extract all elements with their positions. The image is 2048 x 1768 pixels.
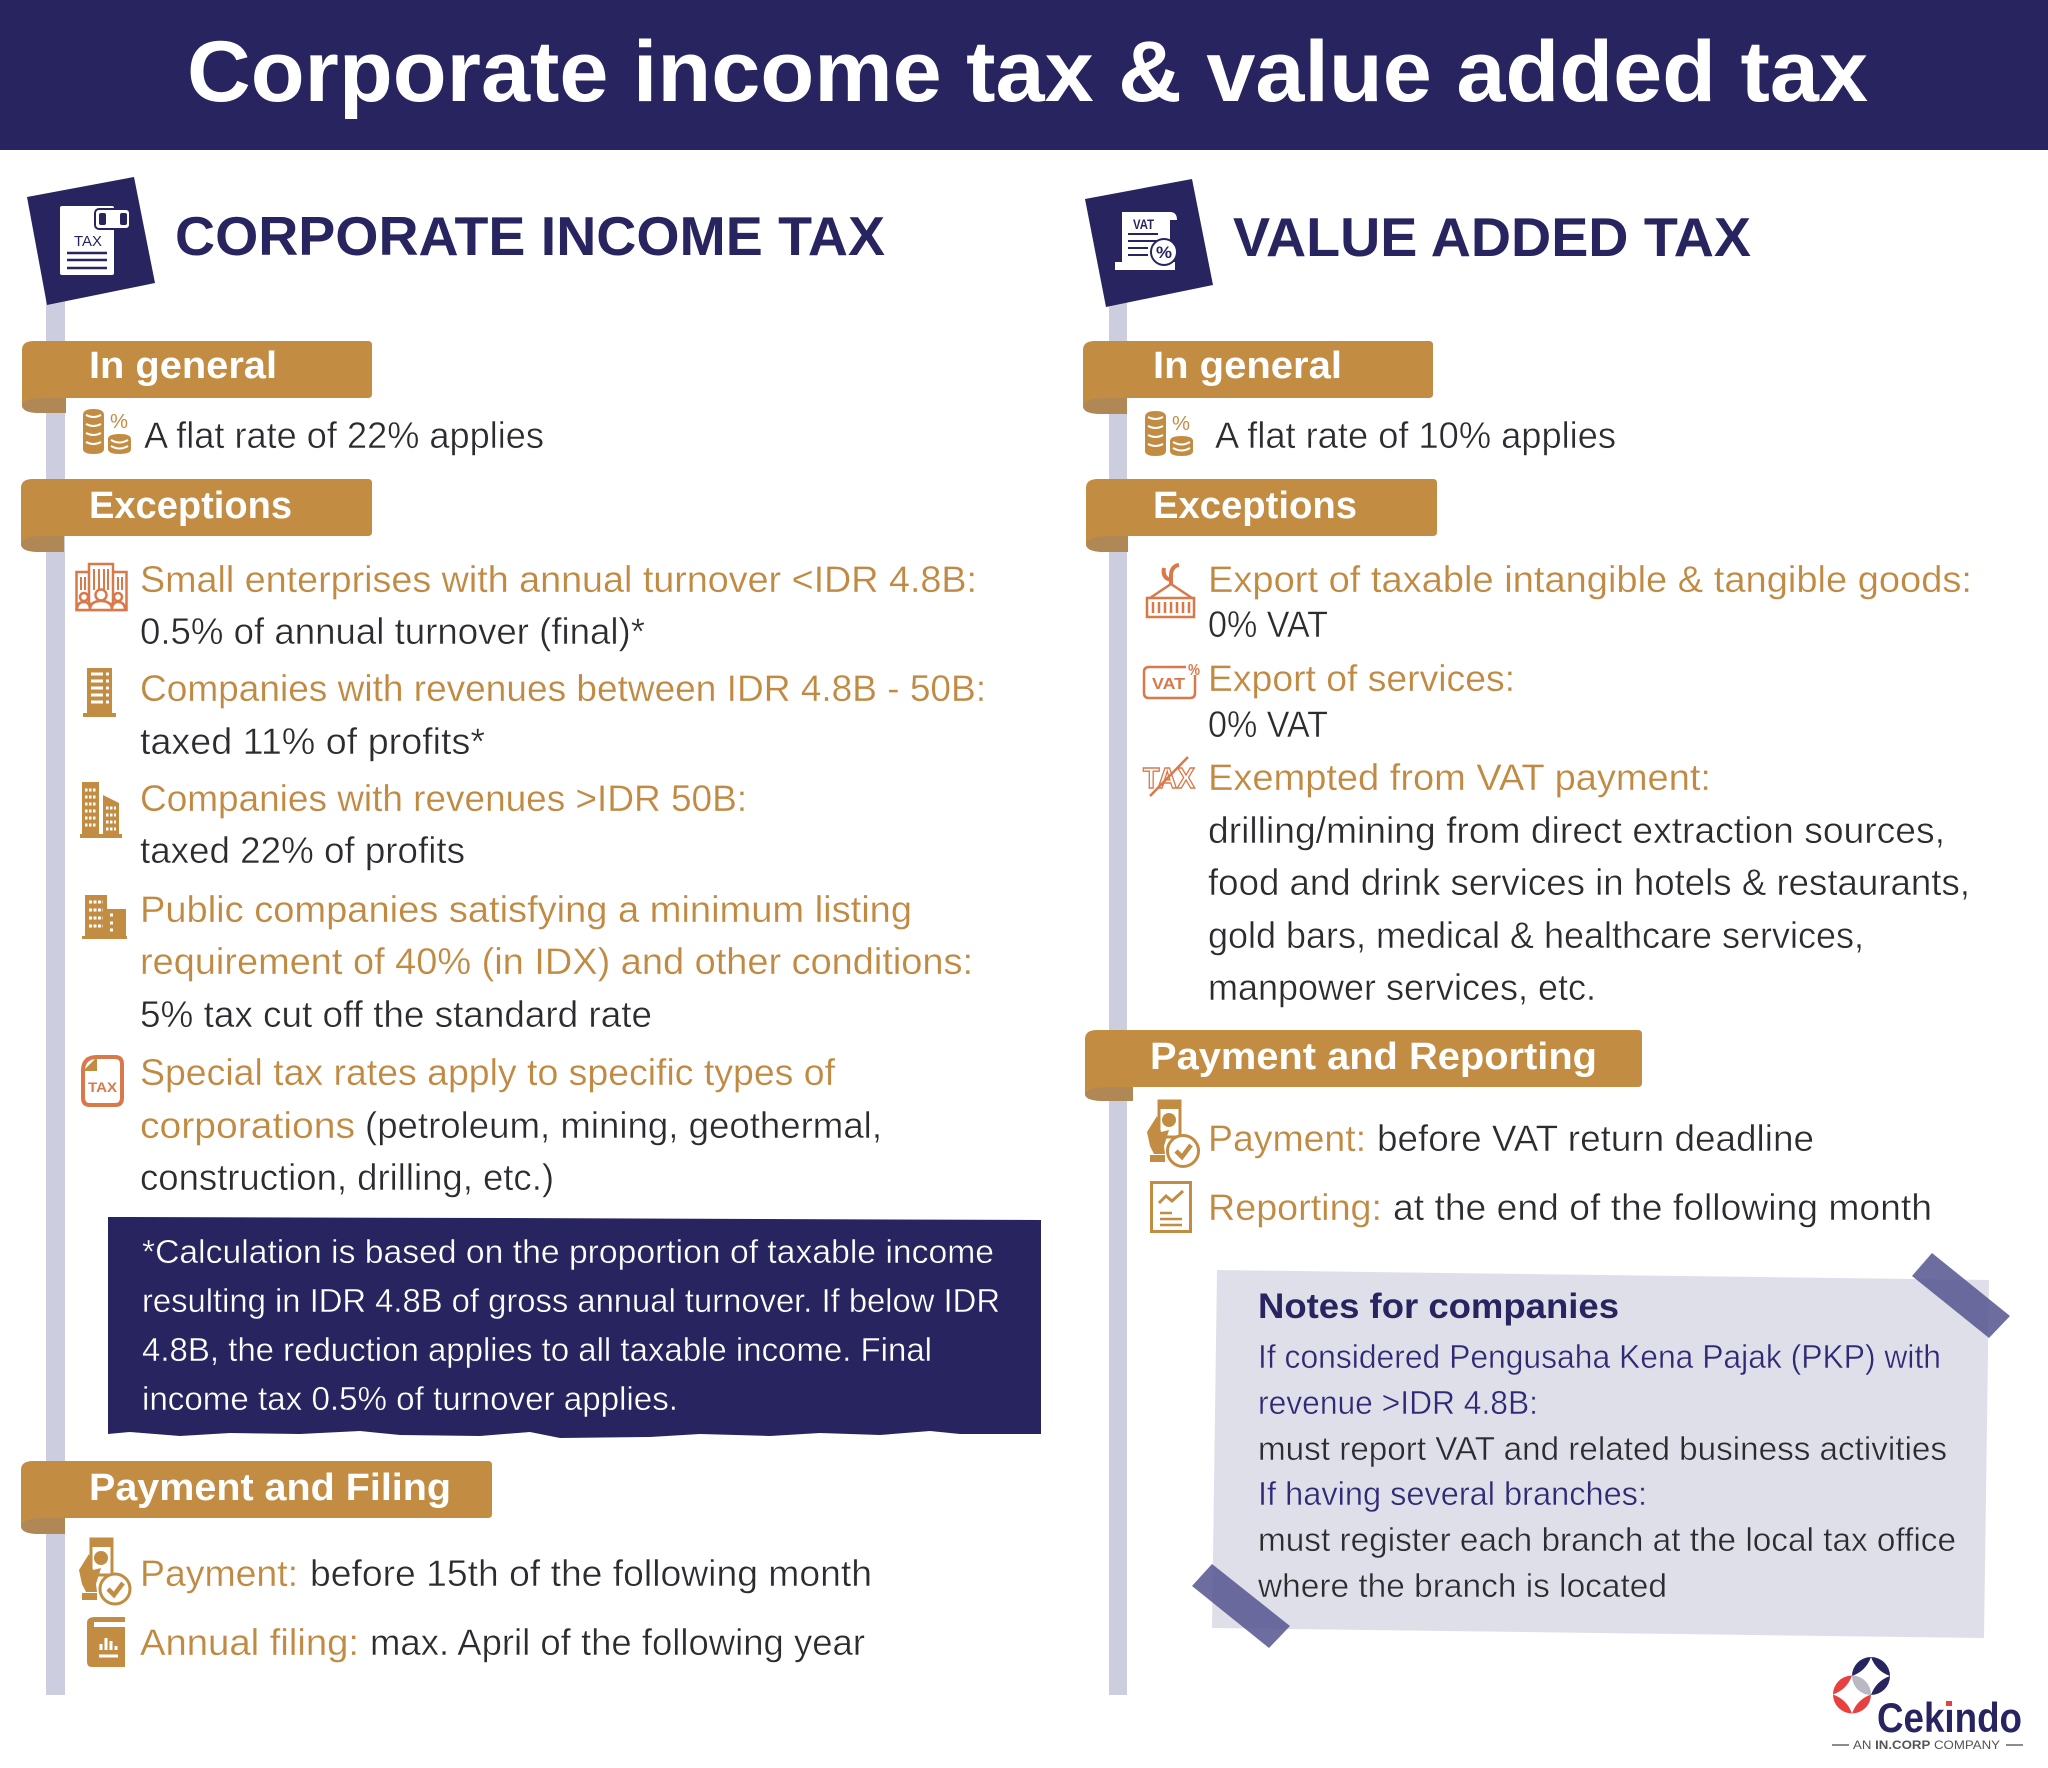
text: notes body: revenue >IDR 4.8B: xyxy=(1258,1385,1538,1422)
tape: bottom left xyxy=(1192,1564,1290,1648)
banner: in general xyxy=(22,341,372,413)
text: special tax rates: (petroleum, mining, geothermal, xyxy=(365,1104,882,1146)
banner: in general: In general xyxy=(1153,345,1342,387)
text: public companies: 5% tax cut off the standard rate xyxy=(140,993,652,1035)
icon: report chart xyxy=(1152,1182,1190,1232)
text: flat rate 10%: A flat rate of 10% applies xyxy=(1215,414,1616,456)
text: notes body: If having several branches: xyxy=(1258,1476,1647,1513)
icon: export container xyxy=(1147,565,1194,617)
icon: VAT percent tag xyxy=(1144,662,1200,698)
icon: coins and percent: % xyxy=(1172,413,1190,435)
icon: wide building xyxy=(82,895,127,939)
title banner: Corporate income tax & value added tax xyxy=(187,24,1868,120)
text: VAT payment deadline: Payment: xyxy=(1208,1117,1366,1159)
banner: payment and reporting: Payment and Reporting xyxy=(1150,1036,1597,1078)
text: exempted from VAT: drilling/mining from direct extraction sources, xyxy=(1208,809,1945,851)
text: annual filing: Annual filing: xyxy=(140,1621,359,1663)
text: flat rate 22%: A flat rate of 22% applies xyxy=(144,414,544,456)
banner: payment and filing xyxy=(21,1461,492,1534)
icon: tax document: TAX xyxy=(74,233,102,250)
icon: VAT document: % xyxy=(1156,243,1172,262)
text: public companies: Public companies satisfying a minimum listing xyxy=(140,888,912,930)
tape: top right xyxy=(1912,1253,2010,1338)
text: export of services xyxy=(1208,657,1515,745)
panel: value added tax xyxy=(1083,179,2010,1648)
text: notes body xyxy=(1257,1339,1956,1605)
icon: coins and percent: % xyxy=(110,411,128,433)
banner: exceptions: Exceptions xyxy=(1153,485,1357,527)
panel: notes for companies xyxy=(1192,1253,2010,1648)
text: special tax rates: corporations xyxy=(140,1104,355,1146)
text: exempted from VAT: Exempted from VAT payment: xyxy=(1208,756,1711,798)
text: annual filing xyxy=(140,1621,865,1663)
banner: exceptions xyxy=(21,479,372,552)
icon: VAT document: VAT xyxy=(1133,216,1154,232)
text: companies above 50B: taxed 22% of profits xyxy=(140,829,465,871)
text: small enterprises: 0.5% of annual turnover (final)* xyxy=(140,610,645,652)
banner: payment and reporting xyxy=(1085,1030,1642,1101)
icon: tax file: TAX xyxy=(88,1079,118,1095)
text: public companies: requirement of 40% (in IDX) and other conditions: xyxy=(140,940,973,982)
text: small enterprises xyxy=(140,558,977,652)
left column pole xyxy=(46,300,65,1695)
icon: hand payment xyxy=(79,1539,130,1604)
text: payment deadline: before 15th of the following month xyxy=(310,1552,872,1594)
text: reporting deadline: Reporting: xyxy=(1208,1186,1382,1228)
text: notes body: If considered Pengusaha Kena Pajak (PKP) with xyxy=(1258,1339,1941,1376)
text: notes body: where the branch is located xyxy=(1257,1568,1667,1605)
banner: in general: In general xyxy=(89,345,277,387)
callout: calculation footnote: *Calculation is based on the proportion of taxable income xyxy=(142,1234,994,1271)
icon: logo mark xyxy=(1833,1657,1890,1714)
callout: calculation footnote xyxy=(108,1217,1041,1438)
text: special tax rates: Special tax rates apply to specific types of xyxy=(140,1051,836,1093)
text: reporting deadline: at the end of the following month xyxy=(1393,1186,1932,1228)
text: notes body: must register each branch at the local tax office xyxy=(1258,1522,1956,1559)
text: payment deadline: Payment: xyxy=(140,1552,298,1594)
icon: VAT document xyxy=(1085,179,1213,307)
text: companies between 4.8B and 50B xyxy=(140,667,986,762)
banner: exceptions: Exceptions xyxy=(89,485,292,527)
heading: value added tax: VALUE ADDED TAX xyxy=(1233,206,1751,268)
text: special tax rates: construction, drilling, etc.) xyxy=(140,1156,554,1198)
text: export of services: Export of services: xyxy=(1208,657,1515,699)
text: VAT payment deadline: before VAT return deadline xyxy=(1377,1117,1814,1159)
text: export of goods: 0% VAT xyxy=(1208,603,1328,645)
banner: in general xyxy=(1083,341,1433,414)
text: exempted from VAT: manpower services, etc. xyxy=(1208,966,1596,1008)
text: companies between 4.8B and 50B: Companies with revenues between IDR 4.8B - 50B: xyxy=(140,667,986,709)
banner: payment and filing: Payment and Filing xyxy=(89,1467,451,1509)
text: special tax rates xyxy=(140,1051,882,1198)
text: export of goods xyxy=(1208,558,1972,645)
text: companies above 50B xyxy=(140,777,747,871)
text: small enterprises: Small enterprises with annual turnover <IDR 4.8B: xyxy=(140,558,977,600)
icon: tax file xyxy=(83,1057,122,1105)
text: tagline: AN IN.CORP COMPANY xyxy=(1853,1738,2000,1752)
callout: calculation footnote: resulting in IDR 4.8B of gross annual turnover. If below IDR xyxy=(142,1283,1000,1320)
text: companies above 50B: Companies with revenues >IDR 50B: xyxy=(140,777,747,819)
icon: coins and percent xyxy=(83,409,131,454)
icon: tax document xyxy=(27,177,155,305)
heading: notes: Notes for companies xyxy=(1258,1287,1619,1326)
icon: small enterprise office xyxy=(76,564,126,610)
text: annual filing: max. April of the following year xyxy=(370,1621,865,1663)
icon: twin buildings xyxy=(80,782,122,838)
icon: report book xyxy=(87,1617,125,1667)
heading: corporate income tax: CORPORATE INCOME TAX xyxy=(175,205,885,267)
icon: tax struck through: TAX xyxy=(1143,763,1196,795)
icon: red dot on i xyxy=(1946,1701,1952,1706)
icon: hand payment xyxy=(1147,1101,1198,1166)
icon: VAT percent tag: VAT xyxy=(1152,676,1185,693)
right column pole xyxy=(1109,300,1127,1695)
text: exempted from VAT: food and drink services in hotels & restaurants, xyxy=(1208,861,1970,903)
icon: coins and percent xyxy=(1145,411,1193,456)
text: exempted from VAT xyxy=(1208,756,1970,1008)
icon: VAT percent tag: % xyxy=(1188,662,1200,679)
panel: corporate income tax xyxy=(21,177,1041,1667)
icon: single building xyxy=(83,668,116,717)
text: Cekindo: Cekindo xyxy=(1877,1694,2022,1741)
title banner xyxy=(0,0,2048,150)
text: public companies xyxy=(140,888,973,1035)
callout: calculation footnote: income tax 0.5% of turnover applies. xyxy=(142,1381,678,1418)
banner: exceptions xyxy=(1086,479,1437,552)
text: export of services: 0% VAT xyxy=(1208,703,1328,745)
logo: Cekindo xyxy=(1832,1657,2023,1752)
text: notes body: must report VAT and related business activities xyxy=(1258,1431,1947,1468)
text: companies between 4.8B and 50B: taxed 11% of profits* xyxy=(140,720,485,762)
text: export of goods: Export of taxable intangible & tangible goods: xyxy=(1208,558,1972,600)
callout: calculation footnote: 4.8B, the reduction applies to all taxable income. Final xyxy=(142,1332,932,1369)
text: exempted from VAT: gold bars, medical & healthcare services, xyxy=(1208,914,1864,956)
